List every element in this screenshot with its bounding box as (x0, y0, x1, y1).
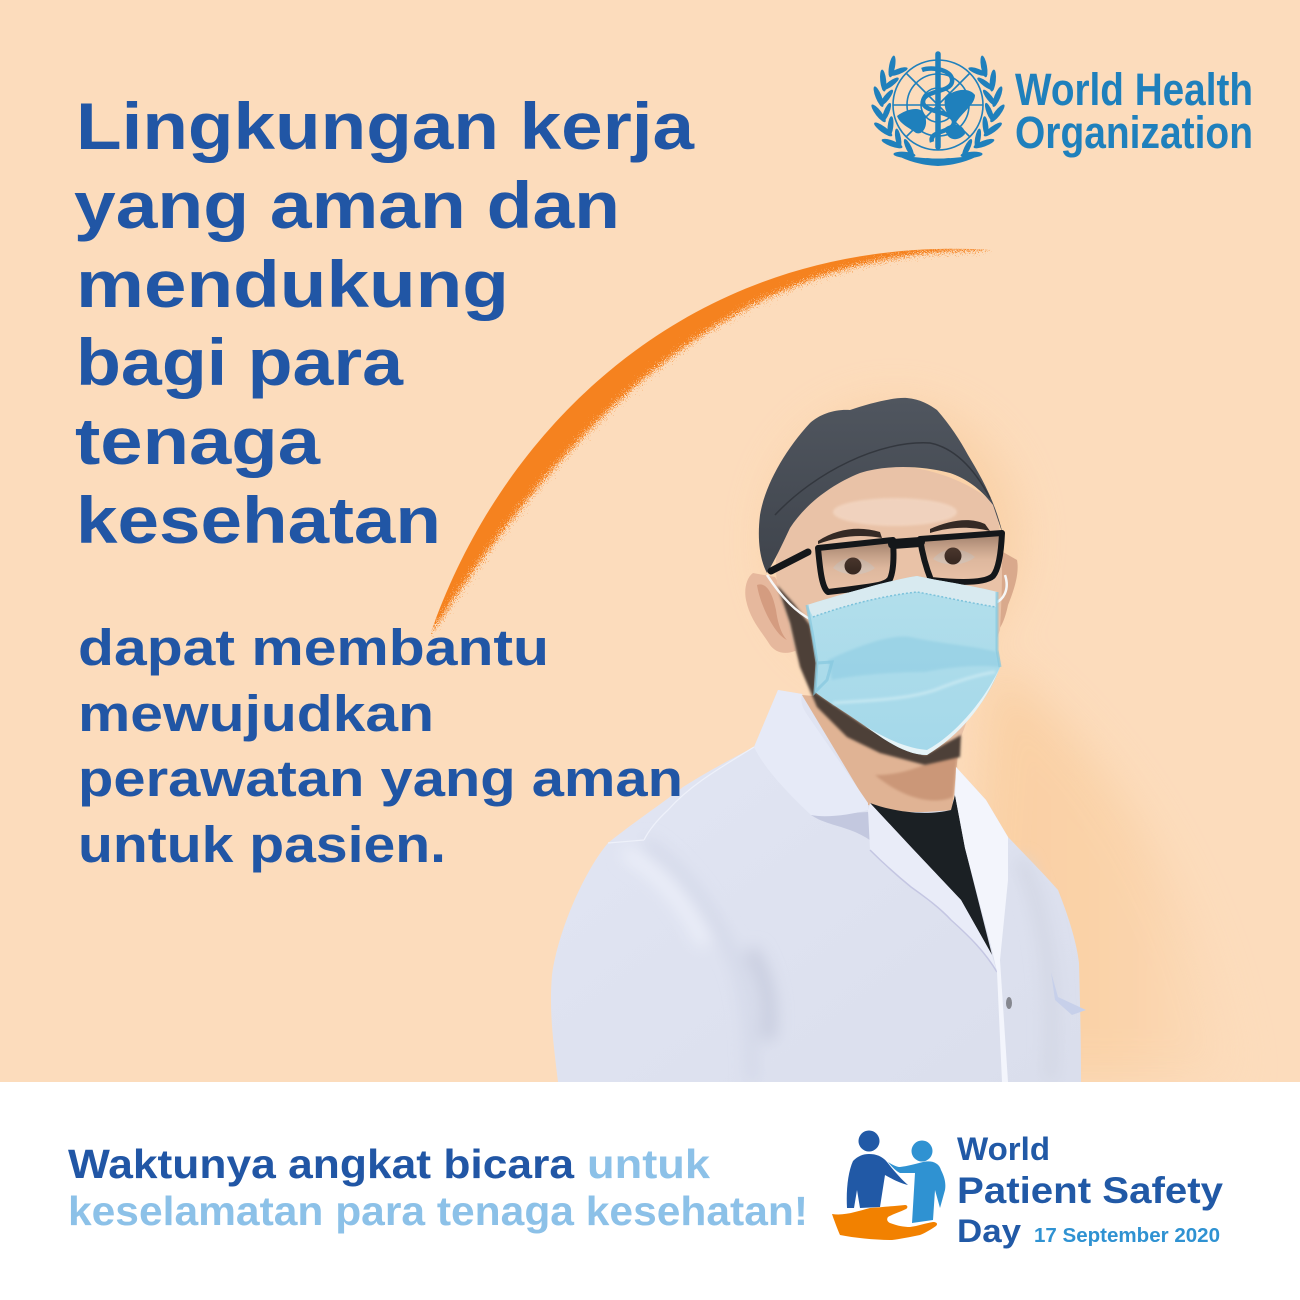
WHO emblem (869, 54, 1007, 166)
neck (802, 695, 960, 812)
globe (893, 60, 983, 150)
subheading (78, 619, 683, 873)
left collar (754, 690, 868, 816)
rod and serpent (935, 54, 941, 147)
footer band (0, 1082, 1300, 1300)
World Patient Safety Day wordmark: Patient Safety (957, 1170, 1223, 1211)
footer slogan: untuk (587, 1141, 710, 1187)
subheading: mewujudkan (78, 685, 434, 742)
subheading: untuk pasien. (78, 816, 446, 873)
dark figure (847, 1130, 908, 1208)
WHO wordmark: Organization (1015, 107, 1253, 158)
footer slogan: keselamatan para tenaga kesehatan! (68, 1188, 808, 1234)
forehead light (833, 498, 957, 526)
eyes (833, 548, 975, 574)
heading: mendukung (76, 247, 509, 321)
ear right (996, 552, 1018, 632)
mask stitching (813, 592, 996, 617)
subheading: perawatan yang aman (78, 750, 683, 807)
World Patient Safety Day wordmark: Day (957, 1213, 1021, 1249)
heading: tenaga (75, 404, 321, 478)
cap (759, 398, 1003, 573)
World Patient Safety Day wordmark: World (957, 1131, 1050, 1167)
left lapel (868, 803, 997, 972)
beard (777, 585, 961, 765)
coat button (1006, 997, 1012, 1009)
heading (74, 89, 695, 557)
coat folds (625, 842, 1052, 1082)
orange swoosh (431, 248, 992, 636)
orange hand (832, 1205, 937, 1240)
lab coat (551, 690, 1081, 1082)
World Patient Safety Day wordmark: 17 September 2020 (1034, 1225, 1220, 1247)
wreath (869, 55, 1007, 166)
heading: bagi para (76, 325, 404, 399)
mask pleats (828, 637, 1000, 703)
WHO wordmark: World Health (1015, 64, 1253, 115)
footer slogan: Waktunya angkat bicara (68, 1141, 575, 1187)
subheading: dapat membantu (78, 619, 549, 676)
coat seam (608, 747, 754, 843)
ear left (745, 573, 800, 653)
light figure (888, 1140, 945, 1223)
mask top band (807, 576, 997, 617)
mask lower rim (865, 667, 1000, 755)
footer slogan (68, 1141, 808, 1234)
lapel edge (870, 850, 997, 972)
face (776, 466, 1002, 750)
WHO wordmark (1015, 64, 1253, 158)
photo: health worker (551, 398, 1086, 1082)
World Patient Safety Day wordmark (957, 1131, 1223, 1249)
glasses (771, 533, 1002, 592)
ear loops (767, 575, 1007, 620)
cap band line (775, 443, 990, 515)
pocket and tag (1051, 972, 1086, 1015)
heading: kesehatan (76, 483, 441, 557)
eyebrows (818, 520, 990, 544)
black undershirt (870, 795, 992, 955)
neck shadow (875, 745, 958, 801)
collar shadow (811, 812, 880, 848)
head glow (770, 405, 1235, 1082)
surgical mask (807, 576, 1000, 755)
right lapel and placket (955, 767, 1008, 1082)
ear left inner (757, 584, 787, 640)
mask side tabs (807, 592, 1000, 692)
heading: yang aman dan (74, 168, 620, 242)
World Patient Safety Day icon (832, 1130, 945, 1240)
heading: Lingkungan kerja (76, 89, 695, 163)
continents (897, 90, 975, 139)
